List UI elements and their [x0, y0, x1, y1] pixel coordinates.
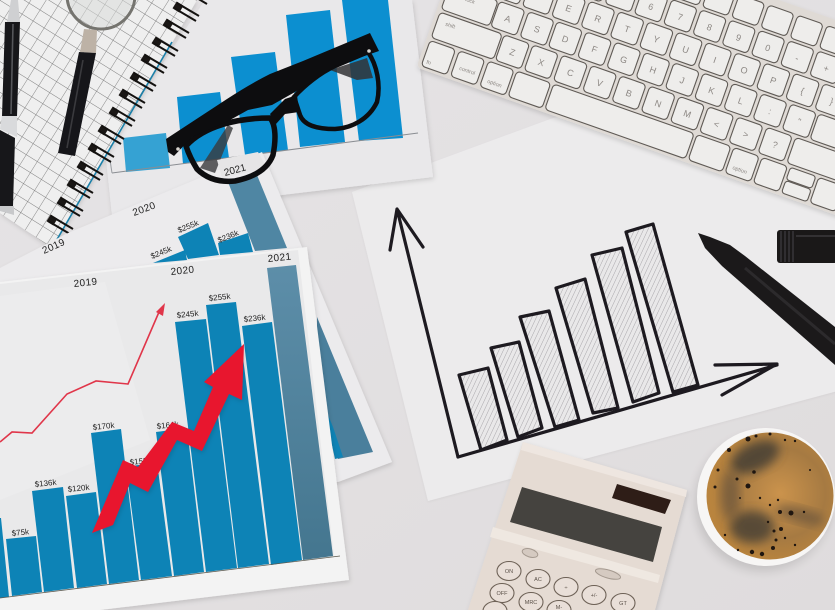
calculator buttons: ON — [505, 569, 513, 575]
letter key rows: C — [566, 67, 576, 79]
panel: rear sheet with year 2020 bars: 2019 — [41, 237, 67, 257]
panel: rear sheet with year 2020 bars: $236k — [216, 228, 241, 245]
icon: coffee cup — [695, 428, 835, 571]
panel: paper with hand-drawn growth chart — [352, 50, 835, 501]
panel: spiral notebook with grid paper — [0, 0, 210, 248]
function and number key rows: 6 — [647, 1, 655, 12]
calculator buttons: GT — [619, 601, 627, 607]
letter key rows: D — [560, 33, 570, 45]
letter key rows: shift — [444, 22, 456, 31]
calculator buttons: OFF — [496, 591, 508, 597]
function and number key rows: 8 — [705, 22, 713, 33]
bar value labels: $245k — [176, 309, 200, 320]
bar value labels: $75k — [11, 527, 30, 538]
panel: rear sheet with year 2020 bars: 2020 — [131, 200, 157, 219]
icon: magnifying glass — [58, 0, 135, 156]
bottom key row with spacebar: option — [731, 165, 748, 176]
function and number key rows — [459, 0, 835, 106]
letter key rows: < — [712, 119, 721, 130]
function and number key rows: 7 — [676, 12, 684, 23]
hand-drawn bar chart — [459, 224, 698, 450]
letter key rows: G — [619, 54, 629, 66]
calculator buttons — [483, 562, 635, 610]
letter key rows: O — [739, 64, 749, 76]
icon: ballpoint pen — [0, 0, 20, 215]
letter key rows: A — [503, 13, 512, 25]
letter key rows: " — [796, 116, 802, 127]
panel: front sheet with blue bar chart — [0, 247, 349, 610]
letter key rows: V — [595, 77, 604, 89]
letter key rows: J — [678, 75, 686, 86]
panel: top sheet with blue bar chart — [105, 0, 433, 216]
bar value labels: $170k — [92, 421, 116, 432]
letter key rows: ? — [771, 139, 779, 150]
panel: rear sheet with year 2020 bars: $245k — [149, 244, 174, 261]
calculator buttons: +/- — [591, 593, 597, 599]
year labels: 2020 — [170, 265, 195, 278]
letter key rows: : — [767, 106, 773, 116]
dark crema swirls — [721, 433, 826, 543]
letter key rows: I — [712, 55, 718, 65]
icon: black marker and cap — [698, 230, 835, 365]
year labels: 2019 — [73, 277, 98, 290]
arrow: red paper growth arrow — [92, 344, 244, 533]
letter key rows: F — [590, 44, 599, 55]
bar value labels: $153k — [129, 456, 153, 467]
letter key rows: E — [564, 3, 573, 14]
bottom key row with spacebar: control — [458, 66, 476, 77]
function and number key rows: 0 — [764, 42, 772, 54]
letter key rows: } — [829, 96, 835, 106]
bar value labels — [11, 292, 267, 538]
letter key rows: N — [653, 98, 663, 110]
letter key rows: T — [623, 24, 632, 35]
letter key rows: S — [532, 24, 541, 35]
bar value labels: $236k — [243, 313, 267, 324]
bottom key row with spacebar: option — [486, 79, 502, 90]
year labels: 2021 — [267, 252, 292, 265]
calculator buttons: MRC — [525, 600, 537, 606]
letter key rows: P — [769, 75, 778, 86]
letter key rows: Z — [508, 47, 517, 58]
letter key rows: R — [593, 13, 603, 25]
calculator buttons: AC — [534, 577, 542, 583]
bar value labels: $120k — [67, 483, 91, 494]
letter key rows: L — [737, 95, 745, 107]
letter key rows: > — [742, 129, 750, 140]
bottom key row with spacebar: fn — [425, 60, 432, 67]
function and number key rows: + — [822, 63, 830, 74]
letter key rows: { — [799, 86, 806, 96]
bar series — [0, 265, 340, 598]
arrow: vertical and horizontal axes — [390, 209, 777, 457]
bar value labels: $164k — [156, 420, 180, 431]
letter key rows: B — [624, 88, 633, 99]
letter key rows: Y — [652, 34, 661, 45]
letter key rows: M — [682, 108, 692, 120]
coffee bubbles — [714, 432, 811, 556]
icon: black glasses — [166, 33, 379, 181]
thin red trend line — [0, 303, 165, 442]
icon: black glasses: 2021 — [223, 162, 248, 179]
panel: rear sheet with year 2020 bars — [0, 152, 392, 482]
year labels — [73, 252, 292, 290]
function and number key rows: - — [794, 53, 800, 64]
letter key rows: U — [681, 44, 690, 56]
calculator buttons: ÷ — [564, 585, 568, 591]
panel: keyboard — [416, 0, 835, 273]
panel: rear sheet with year 2020 bars: $255k — [176, 218, 201, 235]
function and number key rows: 9 — [735, 32, 743, 43]
letter key rows: X — [537, 57, 546, 68]
letter key rows: K — [707, 85, 716, 96]
bar value labels: $255k — [208, 292, 232, 303]
icon: calculator — [463, 442, 687, 610]
letter key rows — [431, 0, 835, 193]
letter key rows: H — [648, 64, 658, 76]
bottom key row with spacebar — [421, 40, 835, 212]
bar value labels: $136k — [34, 478, 58, 489]
